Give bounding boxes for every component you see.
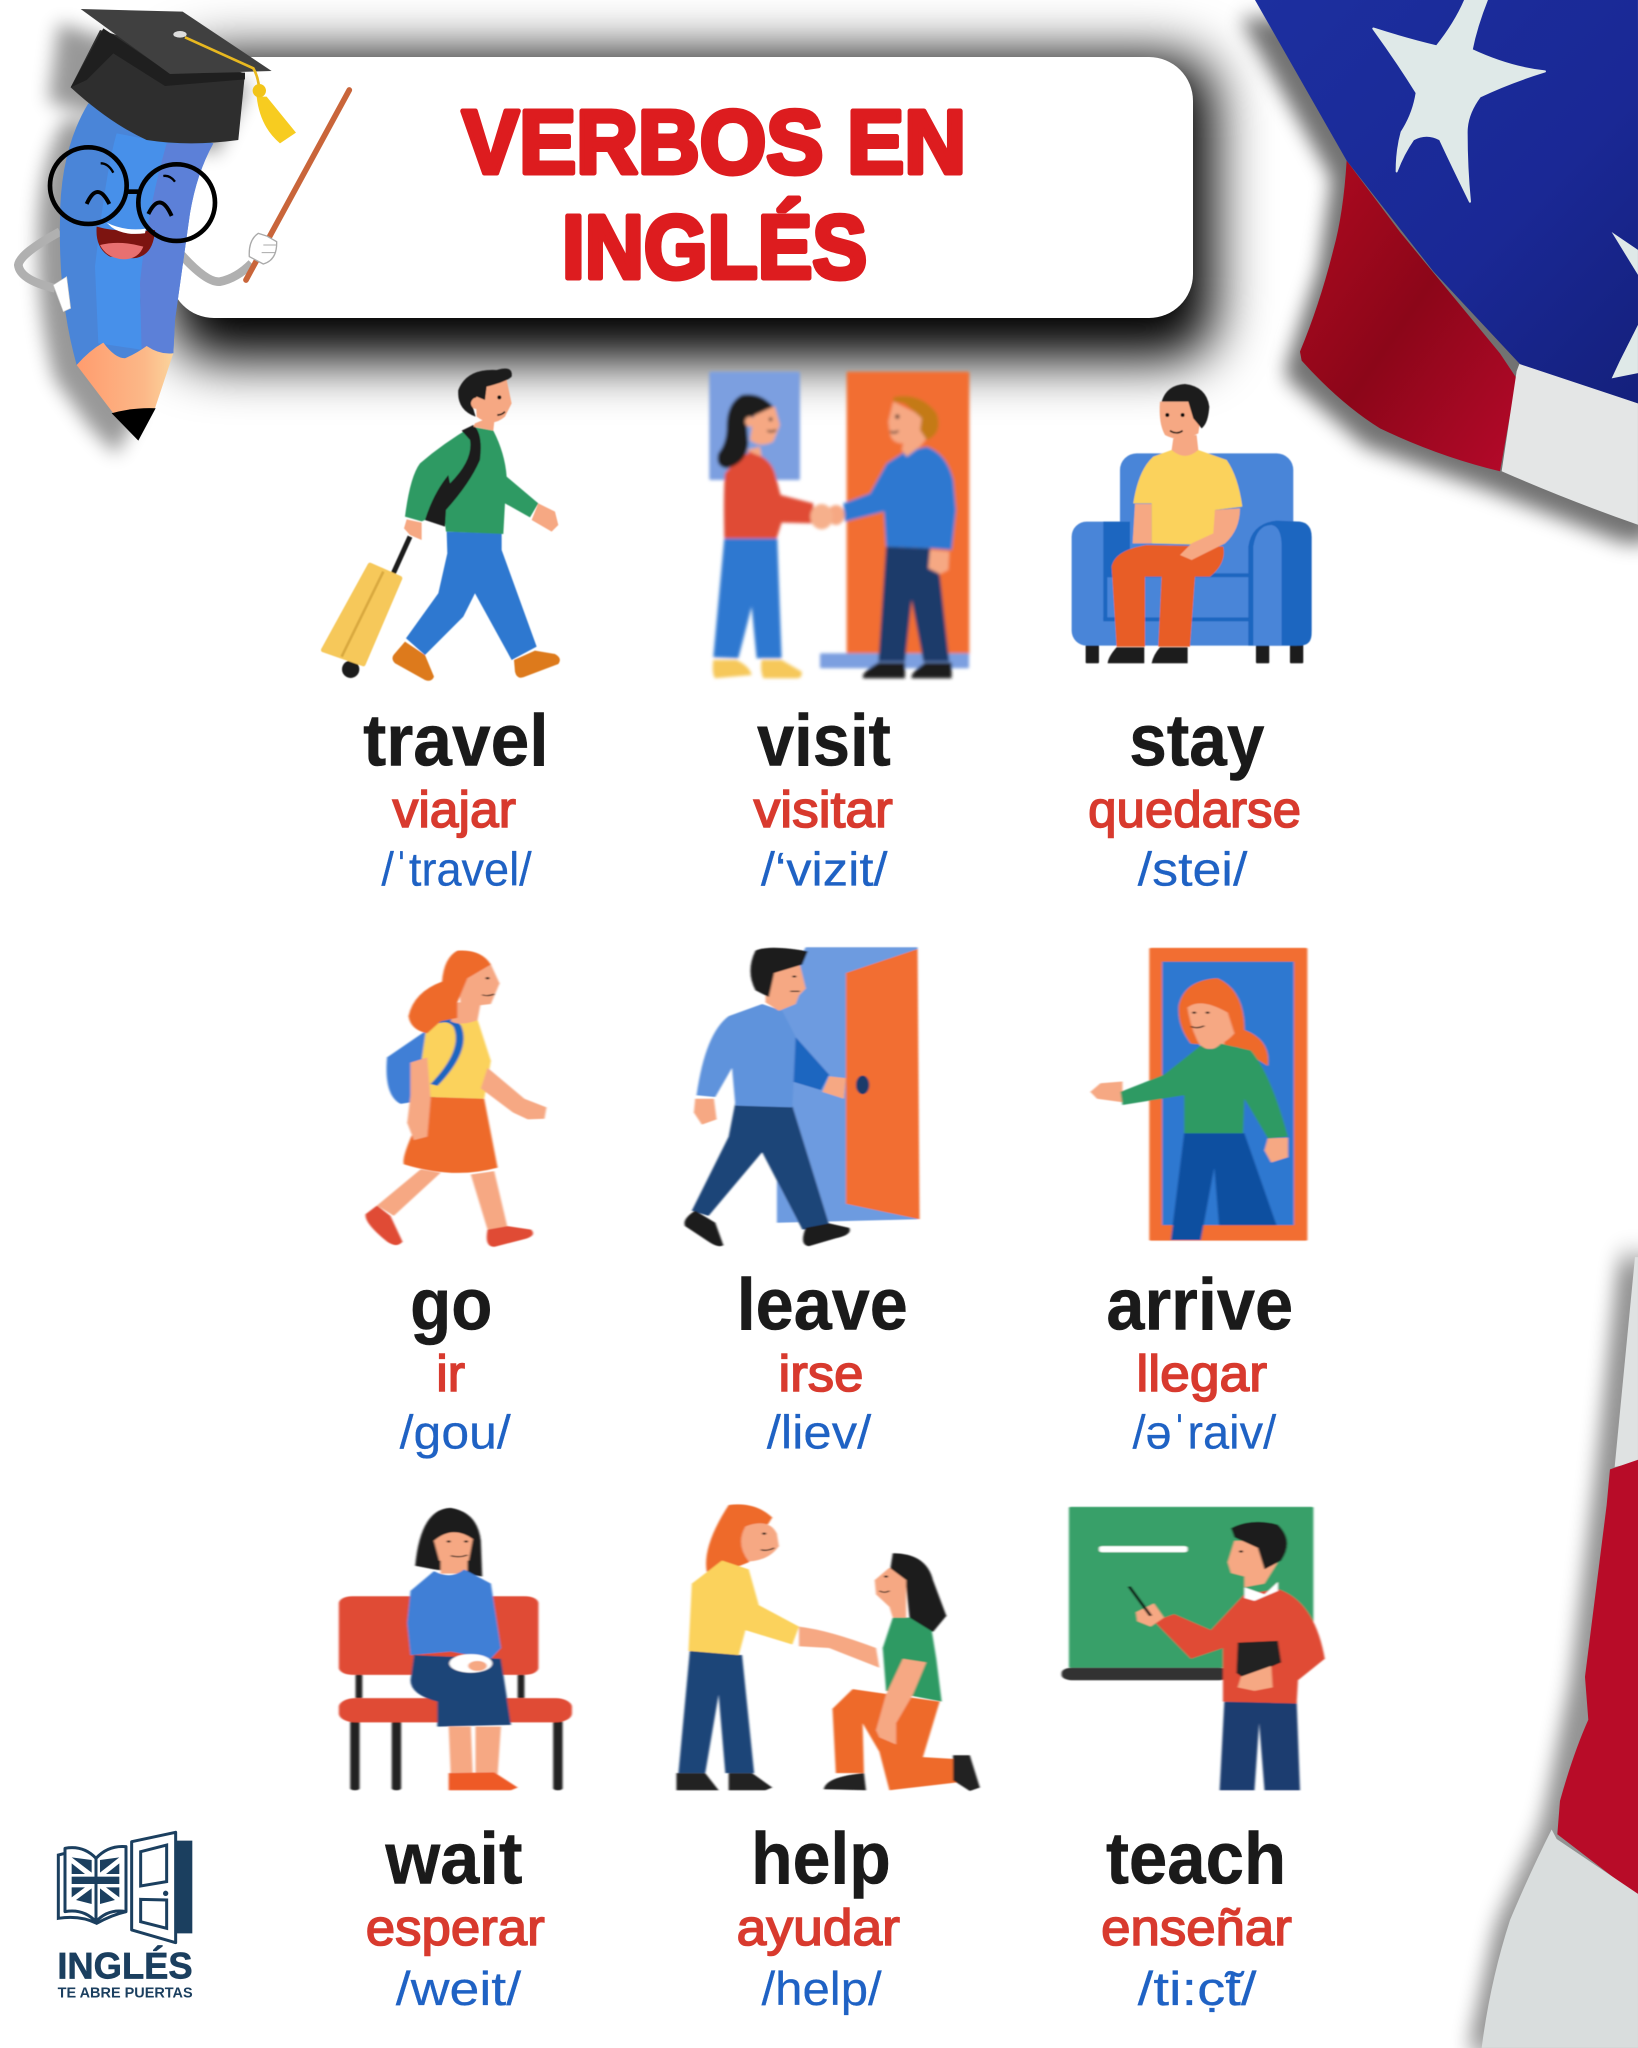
figure: leave [684, 947, 920, 1246]
word: go [400, 1265, 512, 1459]
word: arrive: llegar [1136, 1345, 1267, 1402]
word: help: ayudar [737, 1899, 900, 1956]
word: leave [737, 1265, 908, 1459]
figure: arrive [1090, 948, 1307, 1241]
word: help: help [751, 1819, 891, 1900]
word: leave: irse [778, 1345, 863, 1402]
word: leave: leave [737, 1265, 908, 1346]
word: visit: visitar [754, 781, 893, 838]
flag: top right corner [1240, 0, 1638, 543]
word: go: /gou/ [400, 1406, 512, 1459]
word: visit [754, 700, 893, 896]
word: teach [1101, 1819, 1292, 2015]
word: teach: /ti:c̣̃t/ [1138, 1962, 1258, 2015]
word: help: /help/ [762, 1962, 883, 2015]
word: teach: enseñar [1101, 1899, 1292, 1956]
word: go: go [410, 1265, 492, 1346]
word: stay: stay [1129, 700, 1265, 781]
word: wait [366, 1819, 545, 2015]
figure: visit [709, 372, 969, 678]
word: stay: /stei/ [1138, 843, 1248, 896]
title: line 1: VERBOS EN [462, 93, 966, 193]
word: wait: wait [384, 1819, 522, 1900]
flag: bottom right corner [1467, 1257, 1638, 2048]
title card [170, 57, 1193, 318]
logo: Inglés te abre puertas [57, 1832, 193, 2001]
word: travel: viajar [393, 781, 516, 838]
figure: go [365, 950, 546, 1247]
figure: teach [1062, 1507, 1325, 1790]
logo: Inglés te abre puertas: INGLÉS [57, 1944, 193, 1986]
word: stay [1088, 700, 1301, 896]
mascot: pencil with cap and pointer [18, 9, 349, 455]
word: arrive [1106, 1265, 1293, 1459]
word: leave: /liev/ [767, 1406, 872, 1459]
title card shadow [170, 55, 1215, 360]
word: visit: visit [757, 700, 891, 781]
word: travel [363, 700, 549, 896]
figure: help [676, 1504, 980, 1791]
word: wait: esperar [366, 1899, 545, 1956]
word: arrive: /əˈraiv/ [1132, 1406, 1277, 1459]
figure: stay [1072, 384, 1312, 663]
word: go: ir [436, 1345, 465, 1402]
word: travel: /ˈtravel/ [381, 843, 533, 896]
word: teach: teach [1106, 1819, 1286, 1900]
verb labels [363, 700, 1301, 2015]
title: line 2: INGLÉS [562, 197, 867, 298]
figure: travel [323, 368, 560, 681]
figure: wait [339, 1508, 572, 1790]
word: wait: /weit/ [396, 1962, 522, 2015]
logo: Inglés te abre puertas: TE ABRE PUERTAS [58, 1984, 193, 2001]
word: help [737, 1819, 900, 2015]
word: arrive: arrive [1106, 1265, 1293, 1346]
word: stay: quedarse [1088, 781, 1301, 838]
word: travel: travel [363, 700, 549, 781]
word: visit: /‘vizit/ [761, 843, 889, 896]
